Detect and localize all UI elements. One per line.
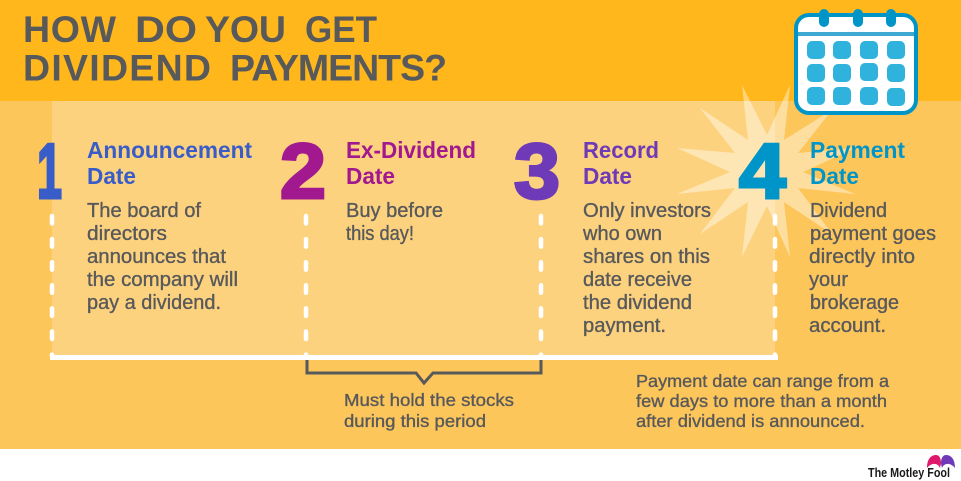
step 4 heading: Payment bbox=[810, 137, 905, 163]
note: holding period bbox=[344, 390, 514, 431]
step 3 text: shares on this bbox=[583, 246, 710, 268]
step 1 heading: Date bbox=[87, 163, 136, 189]
note: payment date range: Payment date can range from a bbox=[636, 371, 889, 391]
step 3 heading bbox=[583, 137, 659, 189]
page background band bbox=[0, 101, 961, 449]
header band bbox=[0, 0, 961, 101]
title: DIVIDEND bbox=[23, 46, 211, 88]
step 2 text bbox=[346, 200, 443, 245]
step 4 number: 4 bbox=[739, 127, 786, 215]
step 3 text: Only investors bbox=[583, 200, 711, 222]
title: HOW bbox=[23, 8, 117, 50]
starburst behind step 4 bbox=[677, 85, 855, 257]
timeline dashed lines and baseline bbox=[50, 216, 778, 360]
step 3 text: the dividend bbox=[583, 292, 692, 314]
note: payment date range: after dividend is announced. bbox=[636, 411, 865, 431]
logo: The Motley Fool bbox=[868, 455, 955, 480]
step 3 text: who own bbox=[582, 223, 662, 245]
step 4 heading: Date bbox=[810, 163, 859, 189]
step 2 heading: Date bbox=[346, 163, 395, 189]
step 4 heading bbox=[810, 137, 905, 189]
step 1 heading: Announcement bbox=[87, 137, 252, 163]
note: holding period: during this period bbox=[344, 411, 486, 431]
note: payment date range: few days to more than a month bbox=[636, 391, 887, 411]
step 1 text: the company will bbox=[87, 269, 238, 291]
step 3 text: date receive bbox=[583, 269, 692, 291]
logo: The Motley Fool: The Motley Fool bbox=[868, 466, 950, 480]
step 4 text: account. bbox=[809, 315, 886, 337]
title: PAYMENTS? bbox=[230, 46, 447, 88]
step 1 text: The board of bbox=[87, 200, 201, 222]
title bbox=[23, 8, 447, 88]
step 4 text: brokerage bbox=[810, 292, 899, 314]
title: GET bbox=[305, 8, 377, 50]
step 4 text: Dividend bbox=[810, 200, 887, 222]
step 2 heading bbox=[346, 137, 476, 189]
step 2 heading: Ex-Dividend bbox=[346, 137, 476, 163]
step 4 text: directly into bbox=[809, 246, 915, 268]
step 2 text: this day! bbox=[346, 223, 414, 245]
title: DO bbox=[135, 8, 197, 50]
step 4 text bbox=[809, 200, 936, 337]
step 1 heading bbox=[87, 137, 252, 189]
step 1 number: 1 bbox=[37, 127, 62, 215]
bracket: holding period bbox=[307, 360, 541, 383]
step 1 text: directors bbox=[87, 223, 167, 245]
step 3 text: payment. bbox=[583, 315, 666, 337]
icon: calendar bbox=[796, 9, 916, 113]
note: holding period: Must hold the stocks bbox=[344, 390, 514, 410]
title: YOU bbox=[205, 8, 286, 50]
step 1 text: announces that bbox=[87, 246, 226, 268]
step 4 text: your bbox=[809, 269, 848, 291]
step 2 text: Buy before bbox=[346, 200, 443, 222]
step 3 number: 3 bbox=[514, 127, 560, 215]
note: payment date range bbox=[636, 371, 889, 431]
timeline panel bbox=[52, 101, 775, 357]
step 2 number: 2 bbox=[280, 127, 326, 215]
step 4 text: payment goes bbox=[810, 223, 936, 245]
step 1 text: pay a dividend. bbox=[87, 292, 221, 314]
step 3 text bbox=[582, 200, 711, 337]
step 3 heading: Date bbox=[583, 163, 632, 189]
step 3 heading: Record bbox=[583, 137, 659, 163]
step 1 text bbox=[87, 200, 238, 314]
